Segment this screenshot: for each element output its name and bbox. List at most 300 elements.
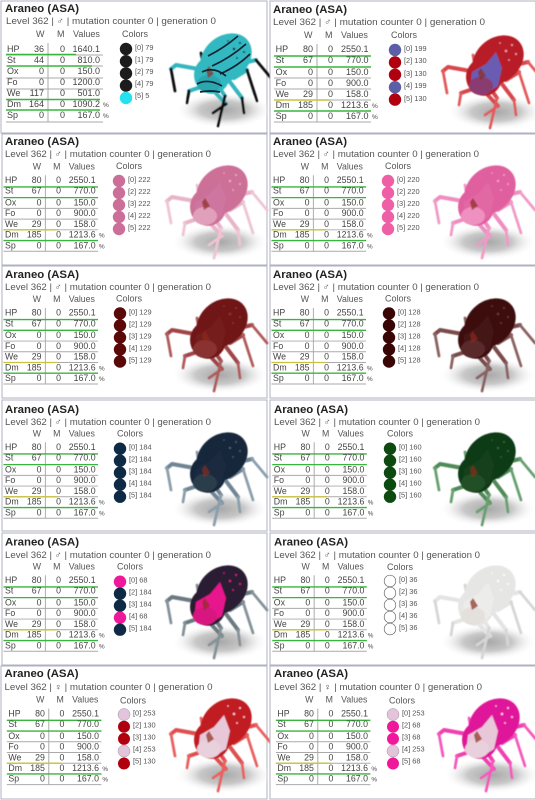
stats table: St bbox=[5, 186, 14, 196]
stats table: Fo bbox=[5, 608, 15, 618]
stats table: We bbox=[276, 89, 289, 99]
stats table: Fo bbox=[273, 208, 283, 218]
stats table: St bbox=[277, 719, 286, 729]
stats table: Fo bbox=[273, 341, 283, 351]
panel: maroon Araneo bbox=[270, 266, 535, 398]
stats table: % bbox=[99, 500, 105, 507]
stats table: 0 bbox=[324, 219, 329, 229]
panel: light pink Araneo bbox=[2, 134, 269, 265]
stats table: 0 bbox=[305, 208, 310, 218]
stats table: 0 bbox=[37, 373, 42, 383]
panel: dark green Araneo bbox=[270, 400, 535, 531]
stats table: 0 bbox=[324, 208, 329, 218]
colour swatches: [4] 128 bbox=[398, 344, 421, 352]
colour swatches: [5] 5 bbox=[135, 91, 149, 100]
stats table: Fo bbox=[5, 341, 15, 351]
stats table: 900.0 bbox=[346, 78, 368, 88]
stats table: 900.0 bbox=[74, 475, 96, 485]
stats table: 0 bbox=[37, 330, 42, 340]
stats table: 0 bbox=[56, 619, 61, 629]
stats table: 0 bbox=[59, 742, 64, 752]
stats table: HP bbox=[5, 575, 17, 585]
stats table: We bbox=[273, 219, 286, 229]
stats table: 0 bbox=[56, 362, 61, 372]
creature subtitle: Level 362 | ♂ | mutation counter 0 | generation 0 bbox=[273, 17, 485, 27]
panel: dark red Araneo bbox=[2, 266, 269, 398]
stats table: W bbox=[36, 29, 45, 39]
stats table: 0 bbox=[305, 475, 310, 485]
stats table: 1213.6 bbox=[69, 497, 96, 507]
creature subtitle: Level 362 | ♂ | mutation counter 0 | generation 0 bbox=[5, 282, 211, 292]
stats table: % bbox=[99, 643, 105, 650]
stats table: 67 bbox=[35, 719, 45, 729]
stats table: 0 bbox=[56, 186, 61, 196]
stats table: 0 bbox=[325, 586, 330, 596]
stats table: 0 bbox=[60, 44, 65, 54]
spider illustration bbox=[167, 422, 269, 527]
stats table: We bbox=[8, 752, 22, 762]
stats table: 0 bbox=[328, 55, 333, 65]
stats table: Fo bbox=[8, 742, 19, 752]
colour swatches: [3] 184 bbox=[129, 600, 152, 609]
stats table: 29 bbox=[304, 752, 314, 762]
stats table bbox=[272, 561, 374, 651]
stats table: 770.0 bbox=[342, 453, 365, 463]
creature title: Araneo (ASA) bbox=[274, 404, 348, 416]
stats table: Dm bbox=[274, 630, 287, 640]
stats table: 0 bbox=[309, 742, 314, 752]
stats table: W bbox=[33, 294, 42, 304]
stats table: 0 bbox=[325, 507, 330, 517]
stats table: 0 bbox=[56, 208, 61, 218]
stats table: 0 bbox=[56, 175, 61, 185]
stats table: 0 bbox=[56, 318, 61, 328]
stats table: 0 bbox=[308, 67, 313, 77]
stats table: 80 bbox=[301, 442, 310, 452]
stats table: 0 bbox=[328, 774, 333, 784]
colour swatches: [0] 220 bbox=[397, 175, 420, 184]
stats table bbox=[271, 294, 373, 384]
spider illustration bbox=[435, 288, 535, 393]
stats table: Ox bbox=[273, 197, 285, 207]
stats table: HP bbox=[8, 708, 21, 718]
stats table: 158.0 bbox=[346, 752, 368, 762]
stats table: 0 bbox=[324, 373, 329, 383]
stats table: 1213.6 bbox=[338, 497, 365, 507]
stats table: Fo bbox=[276, 78, 286, 88]
colour swatches: [5] 184 bbox=[129, 491, 152, 500]
stats table: St bbox=[273, 318, 282, 328]
stats table: 0 bbox=[40, 731, 45, 741]
stats table: 0 bbox=[60, 55, 65, 65]
stats table: Ox bbox=[277, 731, 289, 741]
stats table: 29 bbox=[303, 89, 313, 99]
stats table: 0 bbox=[40, 774, 45, 784]
stats table: % bbox=[367, 365, 373, 372]
colour swatches: [2] 160 bbox=[399, 455, 422, 464]
stats table: 0 bbox=[305, 507, 310, 517]
stats table: 0 bbox=[37, 240, 42, 250]
stats table: HP bbox=[7, 44, 20, 54]
stats table: 0 bbox=[60, 77, 65, 87]
stats table: % bbox=[372, 103, 378, 110]
stats table: 0 bbox=[56, 464, 61, 474]
stats table: HP bbox=[273, 308, 285, 318]
colour swatches: [5] 160 bbox=[399, 491, 422, 500]
stats table: 0 bbox=[325, 464, 330, 474]
stats table: 0 bbox=[56, 507, 61, 517]
stats table: 158.0 bbox=[342, 352, 364, 362]
colour swatches: [2] 130 bbox=[404, 56, 427, 65]
stats table bbox=[274, 30, 378, 122]
stats table: Values bbox=[72, 695, 99, 705]
stats table: M bbox=[325, 30, 332, 40]
panel: bright pink Araneo bbox=[270, 134, 535, 265]
colour swatches bbox=[384, 429, 422, 503]
creature title: Araneo (ASA) bbox=[274, 536, 348, 548]
stats table: 900.0 bbox=[342, 608, 365, 618]
stats table: 80 bbox=[301, 575, 310, 585]
colour swatches: Colors bbox=[122, 29, 149, 39]
stats table: 0 bbox=[325, 619, 330, 629]
stats table: 2550.1 bbox=[341, 44, 368, 54]
colour swatches bbox=[389, 30, 427, 106]
stats table: W bbox=[301, 428, 310, 438]
stats table: 0 bbox=[324, 175, 329, 185]
stats table: St bbox=[8, 719, 17, 729]
stats table: Ox bbox=[274, 597, 286, 607]
stats table: 0 bbox=[328, 763, 333, 773]
stats table: % bbox=[368, 510, 374, 517]
stats table: 0 bbox=[59, 752, 64, 762]
stats table: St bbox=[276, 55, 285, 65]
stats table: HP bbox=[5, 442, 17, 452]
stats table: 185 bbox=[296, 630, 310, 640]
colour swatches bbox=[114, 294, 152, 368]
stats table: 0 bbox=[324, 197, 329, 207]
stats table: 150.0 bbox=[74, 330, 96, 340]
stats table: 0 bbox=[305, 240, 310, 250]
stats table: 900.0 bbox=[342, 208, 364, 218]
stats table: 80 bbox=[32, 575, 42, 585]
stats table: 0 bbox=[328, 731, 333, 741]
stats table: 29 bbox=[300, 219, 310, 229]
stats table: 2550.1 bbox=[341, 708, 368, 718]
stats table: 0 bbox=[56, 352, 61, 362]
stats table: Values bbox=[337, 161, 364, 171]
stats table: 0 bbox=[56, 608, 61, 618]
panel: pink and navy Araneo bbox=[2, 533, 269, 665]
colour swatches bbox=[114, 562, 152, 636]
colour swatches: Colors bbox=[116, 294, 143, 304]
stats table: 185 bbox=[295, 362, 310, 372]
colour swatches: [2] 184 bbox=[129, 588, 152, 597]
stats table: 0 bbox=[56, 486, 61, 496]
stats table: 158.0 bbox=[346, 89, 368, 99]
stats table: Sp bbox=[5, 373, 16, 383]
stats table: 770.0 bbox=[74, 453, 96, 463]
stats table: St bbox=[274, 453, 283, 463]
colour swatches: [5] 68 bbox=[402, 756, 420, 766]
stats table: 0 bbox=[60, 99, 65, 109]
stats table: M bbox=[53, 561, 60, 571]
stats table: Ox bbox=[7, 66, 19, 76]
stats table: 158.0 bbox=[342, 619, 365, 629]
stats table: % bbox=[371, 777, 377, 784]
stats table: 0 bbox=[56, 453, 61, 463]
stats table: Sp bbox=[273, 373, 284, 383]
stats table: 0 bbox=[324, 352, 329, 362]
stats table: 0 bbox=[56, 308, 61, 318]
stats table: 29 bbox=[300, 352, 310, 362]
stats table: 0 bbox=[309, 774, 314, 784]
colour swatches: Colors bbox=[389, 696, 416, 706]
stats table: 67 bbox=[32, 586, 42, 596]
stats table: 900.0 bbox=[346, 742, 368, 752]
stats table: 0 bbox=[305, 608, 310, 618]
creature subtitle: Level 362 | ♂ | mutation counter 0 | generation 0 bbox=[274, 417, 480, 427]
colour swatches: [5] 220 bbox=[397, 223, 420, 232]
panel: magenta and pale pink female Araneo bbox=[270, 666, 535, 799]
stats table: 0 bbox=[60, 88, 65, 98]
colour swatches: [0] 253 bbox=[402, 708, 425, 718]
spider illustration bbox=[167, 288, 269, 393]
stats table: Values bbox=[338, 428, 364, 438]
panel: red and pale pink female Araneo bbox=[1, 666, 273, 799]
stats table: 1213.6 bbox=[341, 100, 368, 110]
creature subtitle: Level 362 | ♂ | mutation counter 0 | generation 0 bbox=[273, 282, 479, 292]
stats table: St bbox=[7, 55, 16, 65]
spider illustration bbox=[435, 422, 535, 527]
colour swatches: [5] 130 bbox=[133, 756, 156, 766]
stats table: 29 bbox=[32, 352, 42, 362]
stats table: Values bbox=[337, 294, 364, 304]
stats table: 0 bbox=[305, 330, 310, 340]
stats table: 167.0 bbox=[342, 240, 364, 250]
stats table: 158.0 bbox=[74, 352, 96, 362]
stats table bbox=[3, 428, 105, 518]
stats table: 150.0 bbox=[74, 197, 96, 207]
colour swatches: Colors bbox=[387, 429, 414, 439]
colour swatches: [3] 129 bbox=[129, 332, 152, 340]
stats table: 158.0 bbox=[77, 752, 99, 762]
stats table: 150.0 bbox=[342, 464, 365, 474]
colour swatches: [2] 129 bbox=[129, 320, 152, 328]
stats table: Sp bbox=[274, 507, 285, 517]
colour swatches: [2] 128 bbox=[398, 320, 421, 328]
stats table: 0 bbox=[56, 586, 61, 596]
stats table: M bbox=[322, 561, 329, 571]
stats table: % bbox=[368, 500, 374, 507]
stats table: 2550.1 bbox=[69, 442, 96, 452]
stats table: 1213.6 bbox=[69, 230, 96, 240]
stats table: We bbox=[274, 619, 287, 629]
stats table: 80 bbox=[32, 442, 42, 452]
colour swatches: [3] 130 bbox=[404, 69, 427, 78]
stats table: Ox bbox=[273, 330, 285, 340]
stats table: Sp bbox=[273, 240, 284, 250]
colour swatches: [4] 36 bbox=[399, 611, 418, 620]
panel: red and purple Araneo bbox=[270, 1, 535, 133]
colour swatches: [5] 128 bbox=[398, 356, 421, 364]
stats table: We bbox=[5, 619, 18, 629]
stats table: 1213.6 bbox=[69, 362, 96, 372]
stats table: 2550.1 bbox=[337, 175, 364, 185]
stats table: 2550.1 bbox=[338, 442, 365, 452]
stats table: Fo bbox=[274, 475, 284, 485]
colour swatches: [5] 129 bbox=[129, 356, 152, 364]
stats table: St bbox=[5, 453, 14, 463]
stats table: M bbox=[57, 695, 64, 705]
stats table: 167.0 bbox=[74, 640, 96, 650]
stats table bbox=[271, 161, 373, 251]
stats table: 67 bbox=[300, 186, 310, 196]
colour swatches bbox=[114, 429, 152, 503]
creature subtitle: Level 362 | ♂ | mutation counter 0 | generation 0 bbox=[273, 149, 479, 159]
colour swatches bbox=[120, 29, 154, 104]
stats table: Sp bbox=[7, 110, 18, 120]
stats table: 1213.6 bbox=[337, 362, 364, 372]
stats table: 67 bbox=[300, 318, 310, 328]
stats table: Sp bbox=[8, 774, 19, 784]
stats table: Dm bbox=[273, 230, 287, 240]
stats table: 0 bbox=[328, 100, 333, 110]
colour swatches: [3] 68 bbox=[402, 732, 420, 742]
stats table: % bbox=[99, 233, 105, 240]
stats table: M bbox=[53, 161, 60, 171]
stats table: Sp bbox=[274, 640, 285, 650]
creature subtitle: Level 362 | ♂ | mutation counter 0 | generation 0 bbox=[274, 550, 480, 560]
stats table: Fo bbox=[7, 77, 18, 87]
stats table: M bbox=[322, 428, 329, 438]
stats table: 167.0 bbox=[346, 774, 368, 784]
stats table: 900.0 bbox=[74, 341, 96, 351]
colour swatches: [2] 130 bbox=[133, 720, 156, 730]
stats table: 0 bbox=[328, 67, 333, 77]
spider illustration bbox=[435, 155, 535, 260]
stats table: 1213.6 bbox=[341, 763, 368, 773]
stats table: 158.0 bbox=[74, 219, 96, 229]
stats table: 0 bbox=[305, 464, 310, 474]
colour swatches: [4] 184 bbox=[129, 479, 152, 488]
stats table: 67 bbox=[301, 586, 310, 596]
stats table: 0 bbox=[328, 752, 333, 762]
stats table: 150.0 bbox=[342, 597, 365, 607]
stats table: 0 bbox=[305, 640, 310, 650]
stats table: 1213.6 bbox=[337, 230, 364, 240]
creature title: Araneo (ASA) bbox=[274, 668, 348, 680]
stats table bbox=[6, 29, 109, 122]
spider illustration bbox=[167, 155, 269, 260]
stats table: W bbox=[304, 30, 313, 40]
colour swatches: [5] 184 bbox=[129, 624, 152, 633]
stats table: 36 bbox=[34, 44, 44, 54]
stats table: 80 bbox=[304, 708, 314, 718]
stats table: 0 bbox=[328, 89, 333, 99]
stats table: 0 bbox=[56, 373, 61, 383]
stats table: 0 bbox=[328, 44, 333, 54]
stats table: 0 bbox=[305, 597, 310, 607]
stats table: 0 bbox=[325, 575, 330, 585]
stats table: 150.0 bbox=[74, 597, 96, 607]
stats table: 0 bbox=[324, 330, 329, 340]
stats table: 167.0 bbox=[74, 507, 96, 517]
stats table: 0 bbox=[325, 497, 330, 507]
stats table: 67 bbox=[301, 453, 310, 463]
stats table: We bbox=[274, 486, 287, 496]
stats table: 0 bbox=[37, 464, 42, 474]
colour swatches: [1] 79 bbox=[135, 55, 154, 64]
stats table: % bbox=[99, 376, 105, 383]
stats table: 0 bbox=[39, 77, 44, 87]
panel: navy Araneo bbox=[2, 400, 269, 531]
stats table: 0 bbox=[37, 208, 42, 218]
stats table: 67 bbox=[32, 453, 42, 463]
stats table: 0 bbox=[37, 475, 42, 485]
stats table: % bbox=[102, 766, 108, 773]
creature title: Araneo (ASA) bbox=[5, 269, 79, 281]
stats table: We bbox=[7, 88, 20, 98]
colour swatches bbox=[113, 161, 151, 235]
stats table: Values bbox=[338, 561, 364, 571]
stats table: 0 bbox=[60, 66, 65, 76]
colour swatches: [4] 68 bbox=[129, 612, 148, 621]
stats table: % bbox=[103, 113, 109, 120]
stats table: 1213.6 bbox=[338, 630, 365, 640]
stats table: St bbox=[5, 586, 14, 596]
stats table: 0 bbox=[325, 608, 330, 618]
stats table: 0 bbox=[37, 597, 42, 607]
stats table: Values bbox=[341, 695, 368, 705]
stats table: 167.0 bbox=[342, 640, 365, 650]
stats table: 0 bbox=[59, 708, 64, 718]
colour swatches: [2] 184 bbox=[129, 455, 152, 464]
stats table: 185 bbox=[27, 497, 42, 507]
colour swatches: Colors bbox=[391, 30, 418, 40]
stats table: 0 bbox=[37, 197, 42, 207]
panel: cyan-striped Araneo bbox=[1, 1, 273, 133]
colour swatches: Colors bbox=[117, 562, 144, 572]
colour swatches bbox=[384, 562, 418, 635]
stats table: 158.0 bbox=[74, 619, 96, 629]
stats table: HP bbox=[5, 308, 17, 318]
stats table: 0 bbox=[56, 219, 61, 229]
stats table: % bbox=[99, 365, 105, 372]
stats table: 1200.0 bbox=[72, 77, 100, 87]
stats table: 0 bbox=[56, 640, 61, 650]
colour swatches: [3] 222 bbox=[128, 199, 151, 208]
stats table: Ox bbox=[5, 597, 17, 607]
stats table: Dm bbox=[273, 362, 287, 372]
creature title: Araneo (ASA) bbox=[5, 3, 79, 15]
colour swatches: [0] 129 bbox=[129, 308, 152, 316]
stats table: 0 bbox=[324, 186, 329, 196]
stats table: 158.0 bbox=[74, 486, 96, 496]
stats table: 167.0 bbox=[342, 373, 364, 383]
creature title: Araneo (ASA) bbox=[5, 136, 79, 148]
stats table: 0 bbox=[37, 640, 42, 650]
colour swatches: [5] 130 bbox=[404, 94, 427, 103]
colour swatches bbox=[118, 696, 156, 770]
stats table: % bbox=[99, 510, 105, 517]
stats table: 900.0 bbox=[74, 208, 96, 218]
stats table: 0 bbox=[328, 719, 333, 729]
stats table: 0 bbox=[325, 597, 330, 607]
colour swatches: [3] 220 bbox=[397, 199, 420, 208]
stats table: 167.0 bbox=[74, 240, 96, 250]
stats table: M bbox=[321, 294, 328, 304]
stats table: 770.0 bbox=[342, 186, 364, 196]
